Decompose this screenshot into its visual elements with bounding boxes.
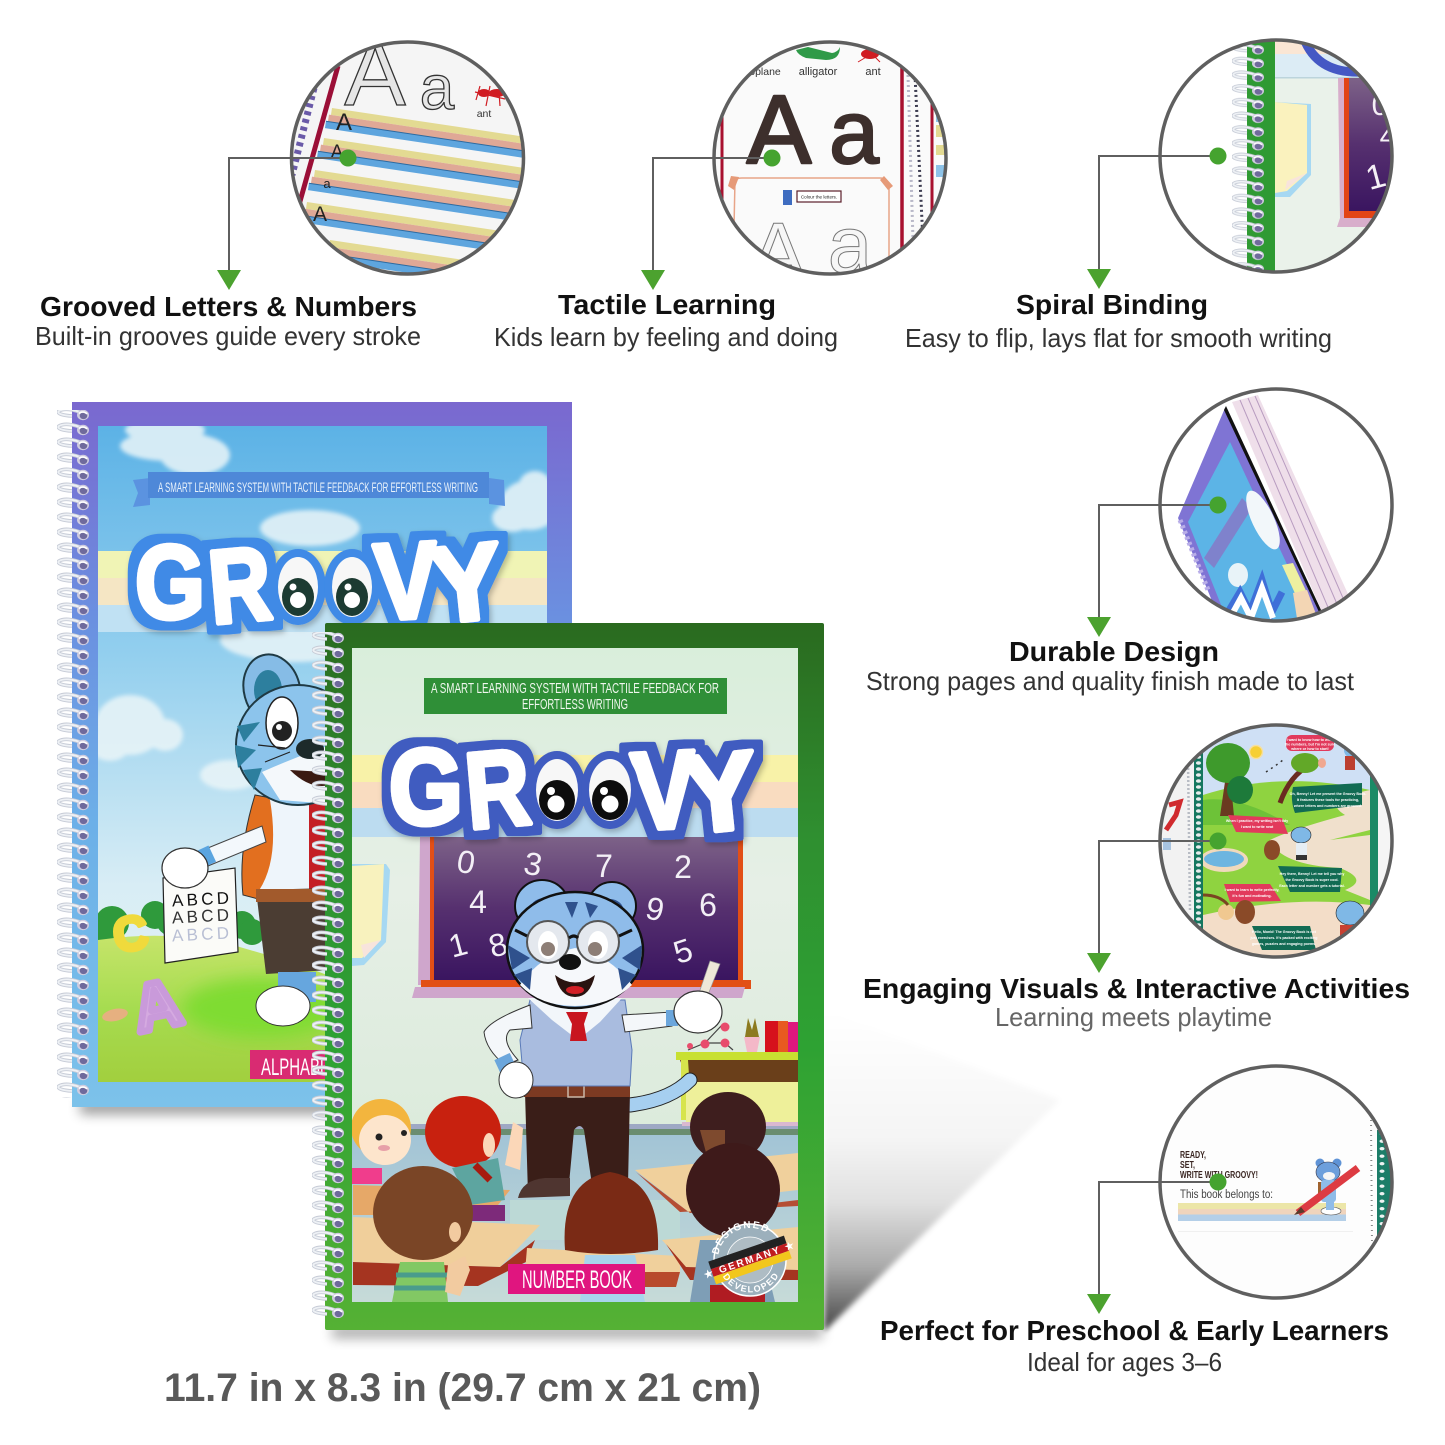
speech bubbles: Oh, Benny! Let me present the Groovy Book. — [1290, 792, 1366, 796]
badge: designed in Germany — [704, 1221, 793, 1297]
speech bubbles — [1224, 735, 1366, 950]
right hand — [674, 991, 722, 1033]
pants — [256, 888, 330, 974]
letter C: C — [110, 906, 151, 963]
magnified circle: a — [829, 83, 880, 183]
magnified circle — [714, 42, 948, 301]
pants — [525, 1097, 630, 1184]
badge: designed in Germany: DESIGNED — [712, 1221, 768, 1254]
callout: grooved letters and numbers — [35, 23, 846, 351]
speech bubbles: games, puzzles and engaging poems. — [1252, 942, 1316, 946]
girl with blond hair — [351, 1099, 411, 1184]
teacher cat — [484, 880, 722, 1198]
tail — [630, 1080, 690, 1105]
tie — [566, 1012, 588, 1041]
left arm — [484, 1005, 532, 1065]
magnified circle: a — [420, 54, 455, 123]
banner — [133, 472, 505, 507]
chalkboard: 7 — [595, 848, 613, 884]
callout: preschool and early learners — [880, 1066, 1392, 1377]
magnified circle: a — [828, 200, 873, 289]
shelf with books — [676, 1018, 798, 1126]
magnified circle: oplane — [749, 66, 781, 78]
vest — [520, 1000, 632, 1086]
speech bubbles: the numbers, but I'm not sure — [1285, 742, 1335, 746]
teal page strip — [1370, 775, 1378, 945]
heading: Grooved Letters & Numbers — [40, 291, 417, 322]
hand and sheet: ABCD — [172, 888, 229, 910]
magnified circle: alligator — [799, 66, 838, 78]
chalkboard: 4 — [469, 884, 487, 920]
glasses — [527, 921, 569, 963]
shadow: long shadow cast by the number book — [824, 1010, 1060, 1330]
stripes — [98, 551, 547, 578]
book: alphabet book, back cover — [57, 402, 572, 1114]
badge: designed in Germany: DEVELOPED — [722, 1273, 778, 1292]
desks, front row — [353, 1217, 798, 1287]
heading: Durable Design — [1009, 636, 1219, 667]
logo: Y — [424, 519, 508, 647]
nose and mouth — [559, 954, 581, 970]
student with short brown hair, back — [565, 1172, 658, 1302]
scene background — [1203, 720, 1370, 960]
speech bubbles: where or how to start! — [1290, 747, 1329, 751]
magnified circle: ant — [865, 66, 881, 78]
chalkboard: 1 — [445, 925, 471, 965]
magnified circle — [1160, 1066, 1392, 1298]
letter A: A — [126, 964, 188, 1046]
head — [236, 685, 360, 805]
chalkboard — [412, 837, 751, 998]
speech bubbles: I want to learn to write perfectly, — [1225, 888, 1279, 892]
banner: A SMART LEARNING SYSTEM WITH TACTILE FEEDBACK FOR — [431, 680, 719, 697]
leader line and arrow — [641, 150, 780, 290]
red tie — [309, 800, 331, 890]
logo — [389, 726, 764, 858]
dimensions caption: 11.7 in x 8.3 in (29.7 cm x 21 cm) — [164, 1366, 761, 1410]
speech bubbles: it's fun and motivating. — [1232, 894, 1272, 898]
student with dark hair at right, back — [690, 1092, 766, 1154]
banner — [424, 678, 727, 714]
magnified circle — [1160, 720, 1392, 960]
shirt collar — [528, 998, 622, 1034]
magnified circle: A — [344, 23, 406, 125]
magnified circle: A — [747, 75, 812, 184]
speech bubbles: I want to know how to write — [1287, 738, 1333, 742]
speech bubbles: Each letter and number gets a tutorial. — [1279, 884, 1345, 888]
heading: Perfect for Preschool & Early Learners — [880, 1315, 1389, 1346]
callout: spiral binding — [905, 30, 1419, 353]
chalkboard: 0 — [454, 843, 478, 881]
stripes — [352, 755, 798, 782]
hand and sheet: ABCD — [172, 905, 229, 927]
sticky note — [352, 864, 390, 966]
magnified circle — [292, 23, 846, 338]
heading: Engaging Visuals & Interactive Activities — [863, 973, 1410, 1004]
description: Ideal for ages 3–6 — [1027, 1347, 1222, 1377]
logo — [135, 519, 508, 647]
ears — [514, 879, 566, 918]
description: Learning meets playtime — [995, 1002, 1272, 1032]
logo: V — [371, 519, 441, 643]
leader line and arrow — [1087, 1174, 1226, 1314]
leader line and arrow — [1087, 148, 1226, 289]
magnified circle: A — [313, 203, 327, 226]
chalkboard: 8 — [485, 925, 511, 965]
boy with brown hair — [373, 1166, 473, 1302]
leader line and arrow — [1087, 832, 1226, 973]
logo: V — [629, 727, 699, 853]
chalkboard: 9 — [643, 890, 667, 928]
label: alphabet — [250, 1050, 340, 1081]
leader line and arrow — [1087, 496, 1226, 637]
speech bubbles: Hey there, Benny! Let me tell you why — [1280, 872, 1344, 876]
characters — [1235, 900, 1255, 924]
heading: Spiral Binding — [1016, 289, 1208, 320]
speech bubbles: where letters and numbers are grooved. — [1293, 804, 1362, 808]
spiral binding — [57, 410, 93, 1098]
inner scene — [352, 648, 798, 1302]
callout: durable design — [866, 389, 1392, 696]
cover board — [325, 623, 824, 1330]
logo: R — [461, 726, 535, 852]
magnified circle: a — [323, 176, 331, 191]
chalkboard: 3 — [521, 845, 545, 883]
callout: tactile learning — [494, 42, 948, 352]
label: number book: NUMBER BOOK — [522, 1266, 632, 1294]
chalkboard: 6 — [699, 887, 717, 923]
magnified circle: A — [750, 206, 807, 301]
hand and sheet: ABCD — [172, 923, 229, 945]
backpack strap — [242, 795, 282, 900]
speech bubbles: When I practice, my writing isn't tidy — [1226, 819, 1288, 823]
label: alphabet: ALPHABET — [261, 1054, 339, 1081]
leg and foot — [278, 972, 316, 1002]
ear — [236, 648, 308, 732]
cover board — [72, 402, 572, 1107]
girl with red hair — [425, 1096, 523, 1221]
belt — [524, 1086, 630, 1097]
magnified circle: SET, — [1180, 1160, 1195, 1171]
chalk — [700, 960, 720, 993]
speech bubbles: It features these tools for practicing, — [1297, 798, 1359, 802]
hand and sheet — [162, 848, 238, 963]
magnified circle — [1160, 30, 1419, 280]
heading: Tactile Learning — [558, 289, 776, 320]
book shadow — [332, 1326, 822, 1338]
clouds — [90, 418, 560, 790]
floor — [410, 1124, 798, 1129]
banner: EFFORTLESS WRITING — [522, 696, 628, 713]
book: number book, front cover — [312, 623, 828, 1346]
inner sky scene — [84, 418, 560, 1082]
magnified circle: 0 — [1372, 89, 1388, 122]
magnified circle: A — [331, 142, 344, 163]
birds — [1266, 760, 1283, 772]
speech bubbles: the Groovy Book is super cool. — [1285, 878, 1339, 882]
head — [507, 892, 643, 1008]
magnified circle: A — [336, 109, 352, 136]
cat character — [162, 648, 360, 1026]
magnified circle: This book belongs to: — [1180, 1189, 1273, 1201]
description: Easy to flip, lays flat for smooth writing — [905, 323, 1332, 353]
logo: G — [135, 524, 205, 641]
banner: A SMART LEARNING SYSTEM WITH TACTILE FEEDBACK FOR EFFORTLESS WRITING — [158, 479, 478, 495]
magnified circle: WRITE WITH GROOVY! — [1180, 1170, 1258, 1181]
description: Kids learn by feeling and doing — [494, 322, 838, 352]
description: Strong pages and quality finish made to last — [866, 666, 1355, 696]
pebble — [102, 1008, 128, 1022]
spiral binding — [312, 632, 348, 1318]
spiral — [1194, 725, 1203, 957]
badge: designed in Germany: ★ GERMANY ★ — [703, 1240, 798, 1281]
book shadow — [80, 1100, 380, 1114]
trees — [1220, 775, 1234, 816]
logo: Y — [676, 727, 764, 858]
sun — [1250, 746, 1262, 758]
callout: engaging visuals — [863, 720, 1410, 1032]
speech bubbles: just exercises. It's packed with exciting — [1250, 936, 1317, 940]
arm — [198, 826, 266, 866]
student with curly hair, back — [686, 1143, 780, 1302]
desks, back row — [353, 1153, 798, 1215]
magnified circle: ant — [477, 108, 491, 120]
speech bubbles: I want to write neat — [1241, 825, 1274, 829]
shoe — [518, 1178, 570, 1198]
pond — [1200, 848, 1248, 872]
magnified circle: READY, — [1180, 1150, 1206, 1161]
magnified circle: Colour the letters. — [801, 194, 837, 200]
shirt — [258, 790, 340, 892]
logo: G — [389, 726, 463, 847]
chalkboard: 5 — [669, 931, 697, 971]
magnified circle — [1160, 389, 1392, 640]
right arm — [622, 1012, 672, 1032]
leader line and arrow — [217, 150, 356, 290]
description: Built-in grooves guide every stroke — [35, 321, 421, 351]
logo: R — [204, 526, 276, 647]
speech bubbles: Hello, Monki! The Groovy Book is not — [1252, 930, 1317, 934]
label: number book — [508, 1264, 645, 1294]
magnified circle: 4 — [1380, 120, 1396, 153]
chalkboard: 2 — [674, 849, 692, 885]
hill and bushes — [98, 906, 129, 939]
magnified circle: 1 — [1362, 156, 1390, 198]
